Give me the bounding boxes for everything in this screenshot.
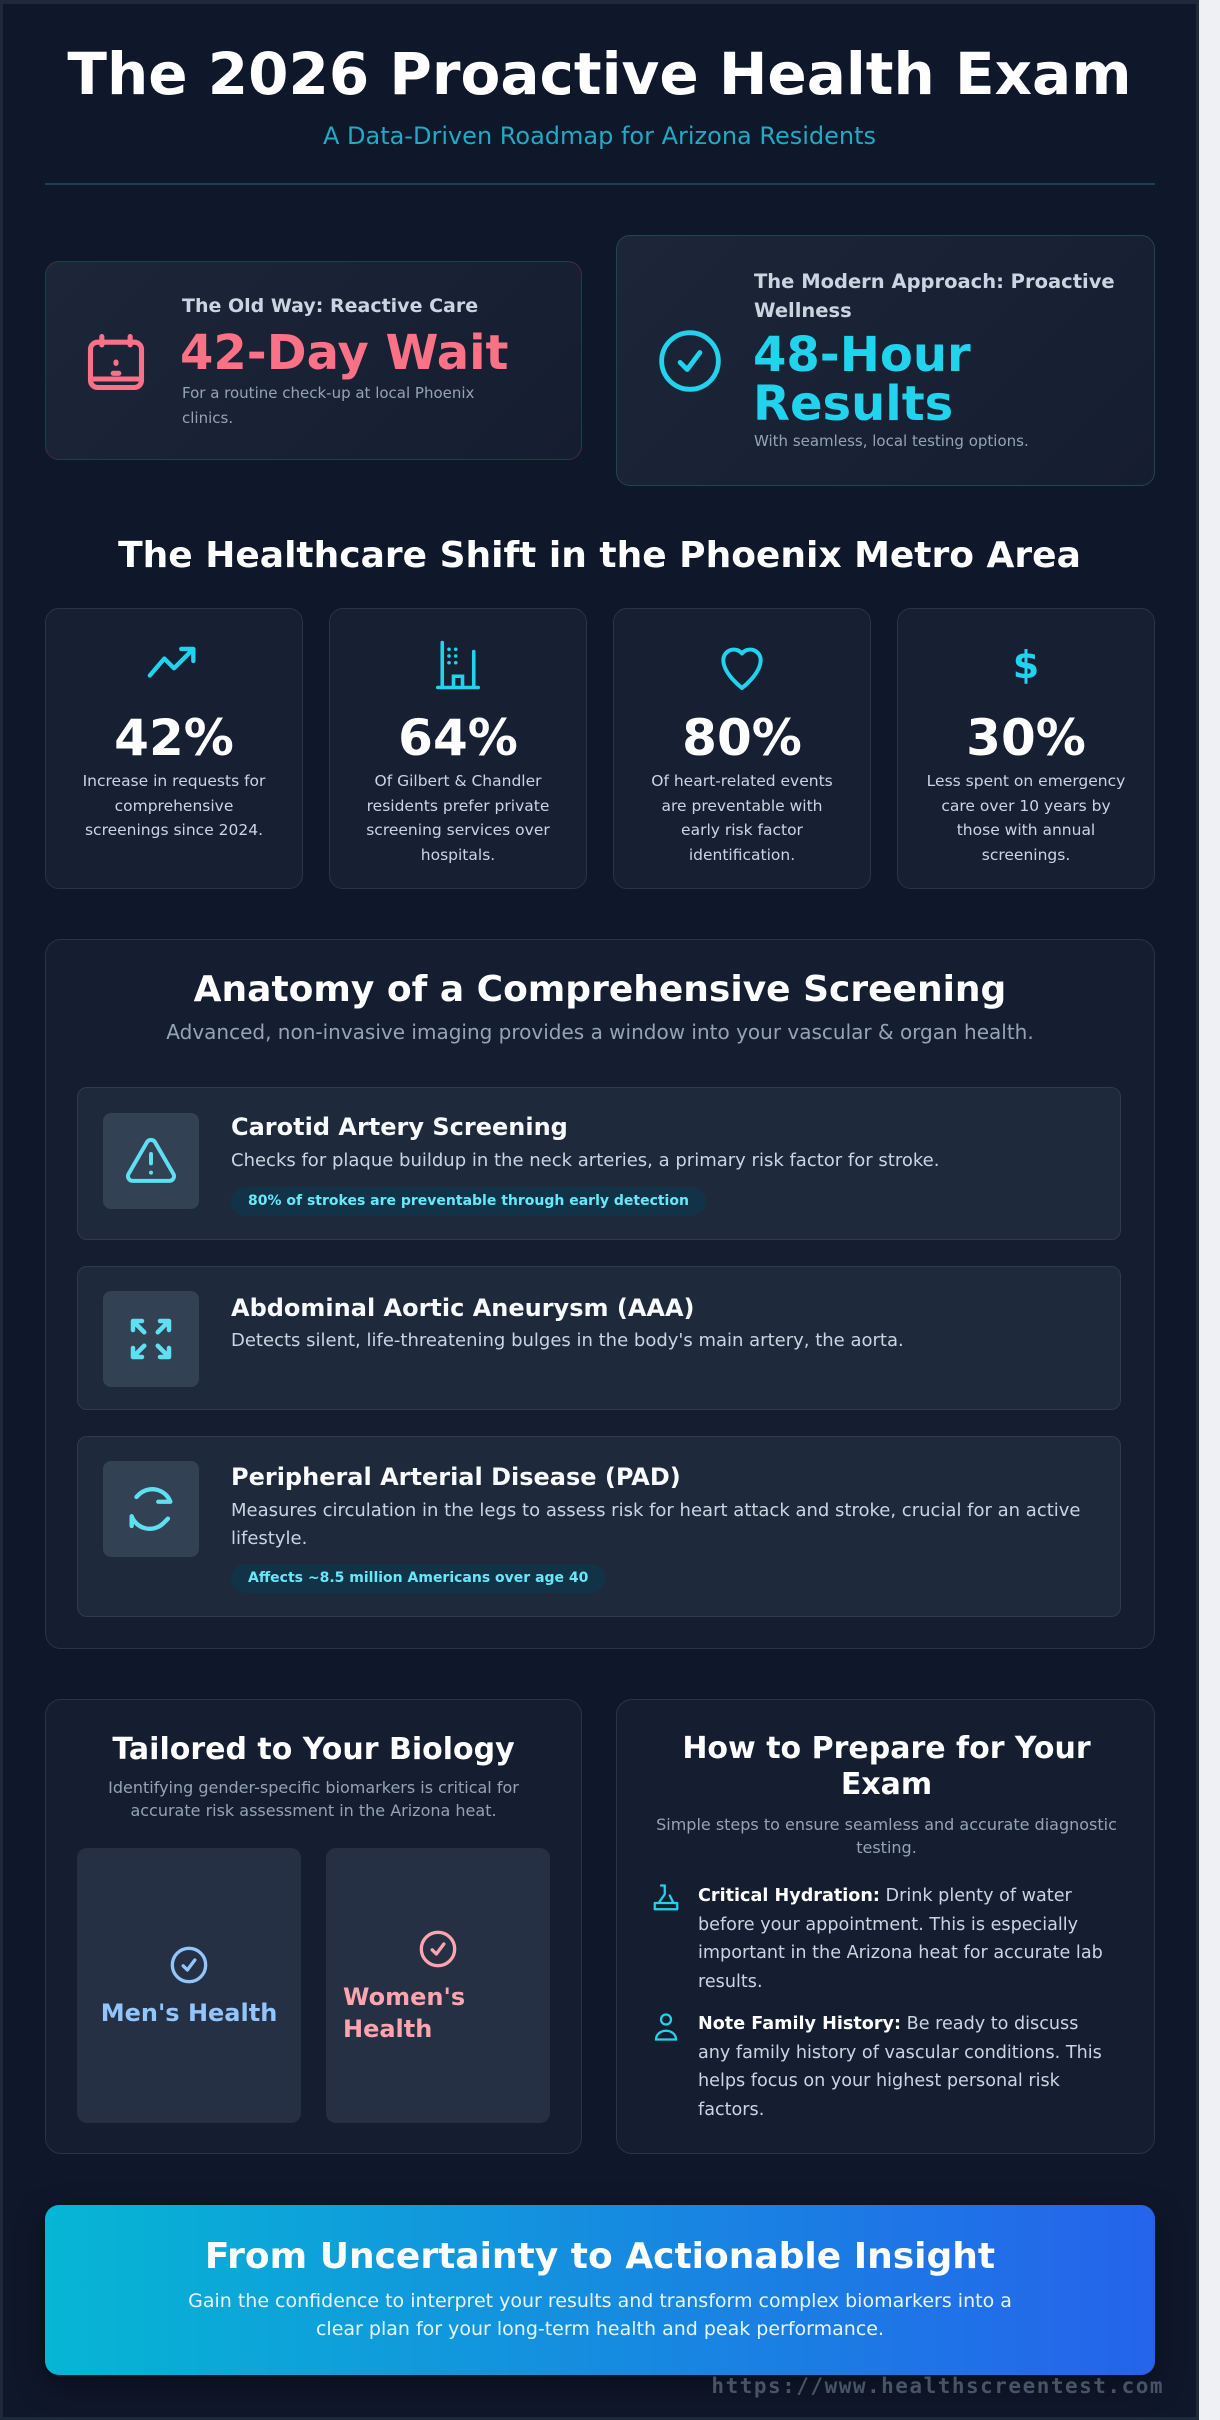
icon: warning xyxy=(103,1113,199,1209)
big stat: Results xyxy=(753,376,953,432)
stat card: 64%: Of Gilbert & Chandler residents prefer private screening services over hospitals. xyxy=(366,772,550,864)
title: The 2026 Proactive Health Exam xyxy=(67,40,1132,108)
stat card: 30%: 30% xyxy=(966,709,1086,767)
heading: Anatomy of a Comprehensive Screening xyxy=(194,969,1006,1010)
item: AAA: Abdominal Aortic Aneurysm (AAA) xyxy=(231,1294,695,1322)
icon: check circle xyxy=(659,330,721,392)
stat pill xyxy=(231,1564,605,1593)
heading: How to Prepare for Your Exam xyxy=(682,1731,1091,1802)
stat card: 80%: Of heart-related events are preventable with early risk factor identification. xyxy=(651,772,833,864)
stat card: 30%: Less spent on emergency care over 10 years by those with annual screenings. xyxy=(927,772,1125,864)
stat card: 42%: 42% xyxy=(114,709,234,767)
icon: calendar xyxy=(88,334,144,390)
heading: The Modern Approach: Proactive Wellness xyxy=(754,270,1115,322)
icon: check xyxy=(170,1946,208,1984)
card: men's health: Men's Health xyxy=(101,1999,277,2027)
stat card: 80%: 80% xyxy=(682,709,802,767)
icon: flask xyxy=(654,1884,678,1910)
subheading: Advanced, non-invasive imaging provides a window into your vascular & organ health. xyxy=(166,1020,1034,1044)
card: women's health: Health xyxy=(343,2015,432,2043)
item: carotid: Checks for plaque buildup in the neck arteries, a primary risk factor for stroke. xyxy=(231,1150,939,1171)
item: PAD: Peripheral Arterial Disease (PAD) xyxy=(231,1463,681,1491)
icon: refresh xyxy=(103,1461,199,1557)
stat card: 42%: Increase in requests for comprehensive screenings since 2024. xyxy=(83,772,265,839)
icon: dollar: $ xyxy=(1013,643,1039,687)
card: women's health xyxy=(326,1848,550,2123)
description: With seamless, local testing options. xyxy=(754,432,1029,450)
subheading: Simple steps to ensure seamless and accurate diagnostic testing. xyxy=(656,1815,1117,1857)
subtitle: A Data-Driven Roadmap for Arizona Residents xyxy=(323,122,876,150)
body: Gain the confidence to interpret your results and transform complex biomarkers into a clear plan for your long-term health and peak performance. xyxy=(188,2290,1012,2340)
card: men's health xyxy=(77,1848,301,2123)
description: For a routine check-up at local Phoenix clinics. xyxy=(182,384,474,427)
item: PAD xyxy=(77,1436,1121,1617)
icon: expand arrows xyxy=(103,1291,199,1387)
card: modern approach xyxy=(616,235,1155,486)
panel: how to prepare xyxy=(616,1699,1155,2154)
item: AAA xyxy=(77,1266,1121,1410)
stat pill xyxy=(231,1187,706,1216)
heading: From Uncertainty to Actionable Insight xyxy=(205,2236,995,2277)
icon: building xyxy=(436,640,480,690)
subheading: Identifying gender-specific biomarkers is critical for accurate risk assessment in the Arizona heat. xyxy=(108,1778,519,1820)
big stat xyxy=(753,327,971,432)
icon: trending up xyxy=(148,646,196,678)
panel: anatomy of a comprehensive screening xyxy=(45,939,1155,1649)
icon: heart xyxy=(721,648,763,690)
url footer: https://www.healthscreentest.com xyxy=(711,2374,1164,2398)
callout: CTA banner xyxy=(45,2205,1155,2375)
stat card: 42% xyxy=(45,608,303,889)
icon: check xyxy=(420,1930,456,1968)
heading: Tailored to Your Biology xyxy=(112,1732,515,1767)
big stat: 42-Day Wait xyxy=(180,325,508,381)
big stat: 48-Hour xyxy=(753,327,971,383)
card: old way xyxy=(45,261,582,460)
item: carotid xyxy=(77,1087,1121,1240)
heading: The Old Way: Reactive Care xyxy=(182,295,478,317)
item: AAA: Detects silent, life-threatening bulges in the body's main artery, the aorta. xyxy=(231,1330,904,1351)
stat card: 64%: 64% xyxy=(398,709,518,767)
stat pill: Affects ~8.5 million Americans over age 40 xyxy=(248,1570,588,1586)
stat card: 64% xyxy=(329,608,587,889)
stat card: 30% xyxy=(897,608,1155,889)
icon: person xyxy=(654,2013,678,2041)
stat card: 80% xyxy=(613,608,871,889)
item: PAD: Measures circulation in the legs to assess risk for heart attack and stroke, crucial for an active lifestyle. xyxy=(231,1500,1081,1549)
section heading: healthcare shift: The Healthcare Shift in the Phoenix Metro Area xyxy=(118,535,1081,576)
item: carotid: Carotid Artery Screening xyxy=(231,1113,568,1141)
step: family history: Note Family History: Be ready to discuss any family history of vascular conditions. This helps focus on your highest personal risk factors. xyxy=(698,2014,1102,2120)
step: hydration: Critical Hydration: Drink plenty of water before your appointment. This is especially important in the Arizona heat for accurate lab results. xyxy=(698,1886,1103,1992)
card: women's health: Women's xyxy=(343,1983,465,2011)
stat pill: 80% of strokes are preventable through early detection xyxy=(248,1193,689,1209)
panel: tailored to your biology xyxy=(45,1699,582,2154)
